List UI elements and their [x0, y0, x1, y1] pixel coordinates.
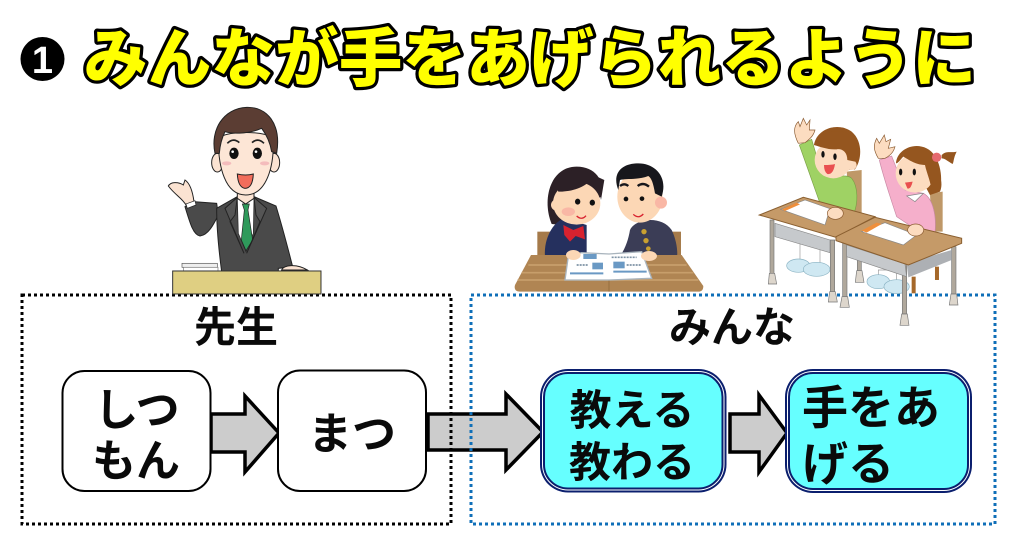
step: raise hands: げる [802, 438, 894, 490]
icon: teacher at podium [168, 107, 321, 294]
arrow: wrap-up to teaching each other [428, 394, 543, 470]
step: teach and learn [540, 369, 726, 492]
step: question: しつ [94, 386, 180, 435]
step: question: もん [92, 437, 180, 486]
icon: children raising hands at desks [759, 118, 962, 325]
step: wrap-up: まつ [308, 410, 396, 459]
heading: teacher: 先生 [194, 304, 278, 351]
arrow: teaching each other to raising hands [730, 395, 787, 472]
title number badge [20, 37, 64, 82]
title: みんなが手をあげられるように [84, 24, 976, 95]
step: teach and learn: 教える [570, 387, 694, 434]
icon: two students sharing a book [515, 163, 703, 292]
step: question [62, 371, 210, 491]
heading: everyone: みんな [669, 304, 795, 351]
step: raise hands: 手をあ [802, 382, 940, 434]
step: teach and learn: 教わる [569, 439, 695, 486]
panel: teacher [22, 295, 451, 524]
arrow: question to wrap-up [211, 396, 279, 472]
title number badge: 1 [32, 40, 53, 82]
step: wrap-up [278, 370, 426, 491]
step: raise hands [785, 369, 972, 493]
panel: everyone [471, 295, 995, 524]
